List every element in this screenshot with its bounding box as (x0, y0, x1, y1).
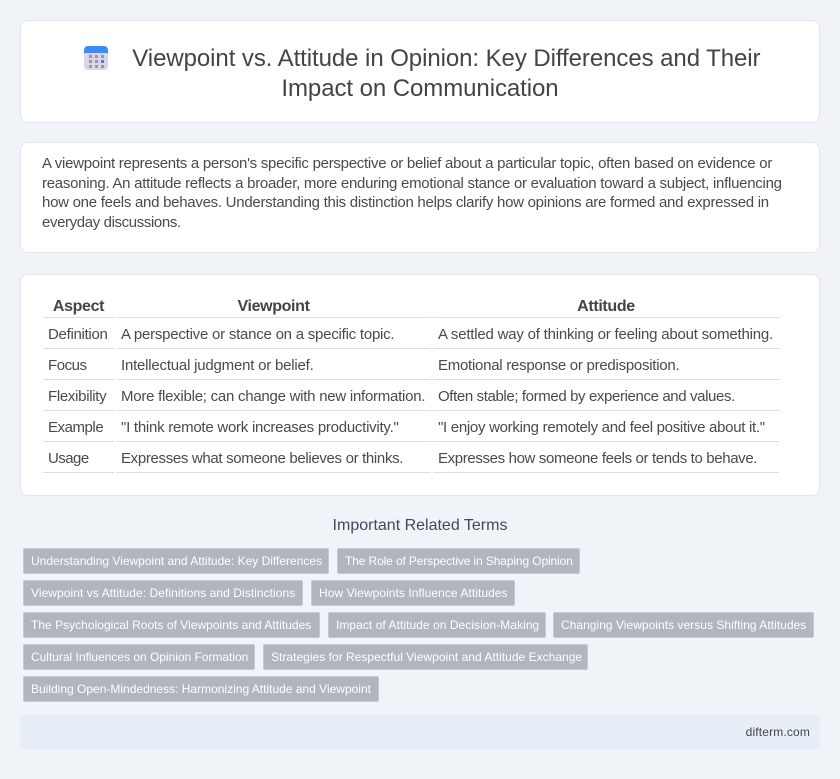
row: definition: Definition (48, 326, 108, 343)
related terms heading: Important Related Terms (333, 517, 507, 534)
footer domain: difterm.com (746, 725, 810, 739)
table heading row: Attitude (577, 298, 635, 315)
row: example: "I enjoy working remotely and feel positive about it." (438, 419, 765, 436)
related term tags: Changing Viewpoints versus Shifting Attitudes (561, 618, 806, 632)
related term tags: Impact of Attitude on Decision-Making (336, 618, 539, 632)
row: example: Example (48, 419, 103, 436)
row: focus: Intellectual judgment or belief. (121, 357, 314, 374)
row: usage: Expresses how someone feels or tends to behave. (438, 450, 757, 467)
row: flexibility: Often stable; formed by experience and values. (438, 388, 735, 405)
row: example (48, 419, 765, 436)
row: usage: Usage (48, 450, 89, 467)
related term tags: Understanding Viewpoint and Attitude: Key Differences (31, 554, 322, 568)
related term tags (23, 548, 814, 702)
row: focus: Emotional response or predisposition. (438, 357, 679, 374)
table heading row (53, 298, 635, 315)
row: flexibility: More flexible; can change with new information. (121, 388, 425, 405)
related term tags: Building Open-Mindedness: Harmonizing Attitude and Viewpoint (31, 682, 371, 696)
footer bar (20, 715, 820, 749)
intro text: A viewpoint represents a person's specific perspective or belief about a particular topic, often based on evidence or (42, 155, 772, 172)
title (132, 45, 760, 102)
related term tags: How Viewpoints Influence Attitudes (319, 586, 508, 600)
header panel (20, 20, 820, 123)
table heading row: Viewpoint (237, 298, 310, 315)
row: focus: Focus (48, 357, 87, 374)
title: Impact on Communication (281, 75, 559, 102)
row: usage (48, 450, 757, 467)
row: flexibility (48, 388, 735, 405)
row: definition (48, 326, 773, 343)
row: usage: Expresses what someone believes or thinks. (121, 450, 403, 467)
row: definition: A perspective or stance on a specific topic. (121, 326, 394, 343)
row: focus (48, 357, 679, 374)
related term tags: The Role of Perspective in Shaping Opinion (345, 554, 573, 568)
table heading row: Aspect (53, 298, 104, 315)
intro text: how one feels and behaves. Understanding this distinction helps clarify how opinions are formed and expressed in (42, 194, 769, 211)
comparison table panel (20, 274, 820, 496)
related term tags: Cultural Influences on Opinion Formation (31, 650, 248, 664)
row: definition: A settled way of thinking or feeling about something. (438, 326, 773, 343)
related term tags: The Psychological Roots of Viewpoints and Attitudes (31, 618, 311, 632)
related term tags: Strategies for Respectful Viewpoint and Attitude Exchange (271, 650, 582, 664)
title: Viewpoint vs. Attitude in Opinion: Key Differences and Their (132, 45, 760, 72)
row: example: "I think remote work increases productivity." (121, 419, 399, 436)
intro paragraph panel (20, 142, 820, 253)
icon: calendar (84, 46, 108, 70)
related term tags: Viewpoint vs Attitude: Definitions and Distinctions (31, 586, 295, 600)
intro text: reasoning. An attitude reflects a broader, more enduring emotional stance or evaluation toward a subject, influencing (42, 175, 782, 192)
row: flexibility: Flexibility (48, 388, 106, 405)
intro text: everyday discussions. (42, 214, 181, 231)
intro text (42, 155, 782, 231)
